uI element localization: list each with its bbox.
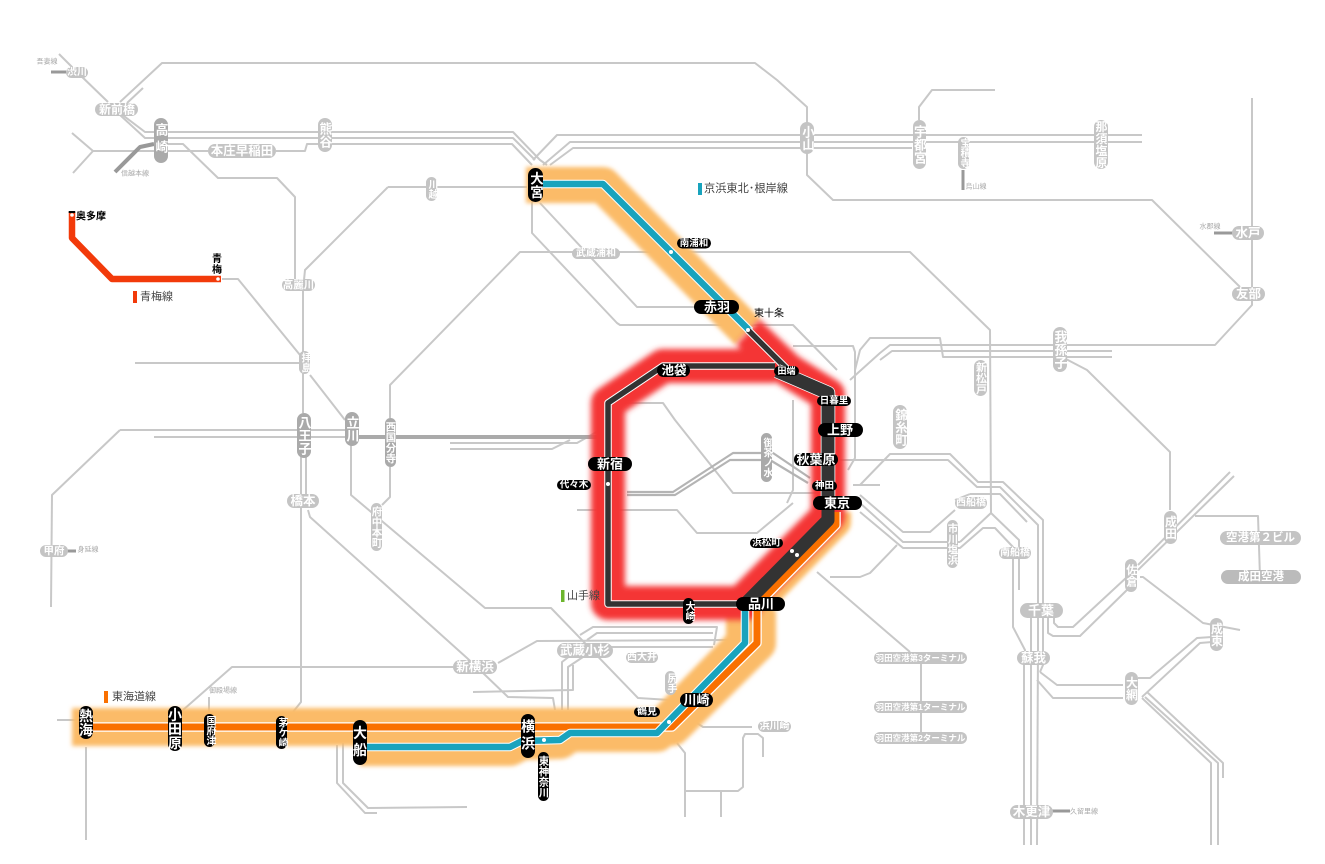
station: Oyama: 小山 <box>800 126 814 150</box>
station: Shin-Maebashi: 新前橋 <box>99 102 135 116</box>
station: Haneda Terminal 2: 羽田空港第2ターミナル <box>876 733 966 743</box>
station: Akabane <box>694 300 739 314</box>
station: Ueno <box>818 422 863 438</box>
legend: Ome line: 青梅線 <box>140 289 173 303</box>
station: Honjo-Waseda: 本庄早稲田 <box>211 143 273 158</box>
station: Ochanomizu: 御茶ノ水 <box>761 436 773 478</box>
station: Akihabara: 秋葉原 <box>796 452 836 467</box>
station: Higashi-Kanagawa: 東神奈川 <box>538 755 550 798</box>
branch line labels: 烏山線 <box>966 182 986 190</box>
station: Kinshicho: 錦糸町 <box>893 407 907 446</box>
station: Ikebukuro: 池袋 <box>661 362 687 378</box>
station: Hamamatsucho: 浜松町 <box>752 536 781 548</box>
station: Shin-Yokohama: 新横浜 <box>456 659 494 674</box>
station: Mito: 水戸 <box>1235 225 1261 240</box>
station: Sakura: 佐倉 <box>1125 563 1138 588</box>
branch line labels: 御殿場線 <box>209 686 237 694</box>
label: Higashi-Jujo: 東十条 <box>754 306 784 320</box>
legend: Tokaido line: 東海道線 <box>112 689 156 703</box>
station: Kanda <box>812 480 837 492</box>
station: Chiba <box>1020 603 1063 618</box>
station: Soga: 蘇我 <box>1021 650 1046 665</box>
station: Takasaki: 高崎 <box>154 122 168 157</box>
station: Tabata <box>774 365 799 376</box>
station: Hashimoto: 橋本 <box>290 493 316 508</box>
station: Narita Airport Terminal 2: 空港第２ビル <box>1226 530 1295 544</box>
Keihin-Tohoku Negishi line <box>360 184 750 747</box>
station: Shinjuku: 新宿 <box>597 456 623 472</box>
station: Shitte: 尻手 <box>665 673 677 694</box>
station: Minami-Urawa: 南浦和 <box>680 237 708 249</box>
station: Shibukawa: 渋川 <box>67 65 87 78</box>
station: Tokyo: 東京 <box>824 496 850 510</box>
station: Osaki: 大崎 <box>683 600 695 622</box>
station: Nishi-Oi: 西大井 <box>627 650 657 663</box>
label: Okutama: 奥多摩 <box>76 210 106 222</box>
station: Minami-Funabashi: 南船橋 <box>1000 546 1030 558</box>
station: Atami: 熱海 <box>78 708 94 738</box>
station: Tsurumi: 鶴見 <box>637 704 657 718</box>
station: Shin-Matsudo: 新松戸 <box>974 360 987 395</box>
station: Nasushiobara: 那須塩原 <box>1094 120 1108 168</box>
station: Shinjuku <box>588 456 632 472</box>
station: Musashi-Urawa: 武蔵浦和 <box>576 246 616 259</box>
branch line labels <box>36 56 1220 816</box>
station: Nishi-Funabashi: 西船橋 <box>956 496 986 508</box>
station: Haijima: 拝島 <box>299 351 311 373</box>
station: Shinagawa <box>736 596 785 612</box>
station: Fuchu-Hommachi: 府中本町 <box>370 506 382 548</box>
black station pills <box>78 168 863 801</box>
station: Naruto: 成東 <box>1210 621 1224 647</box>
station: Ofuna: 大船 <box>352 725 368 760</box>
station: Kofu: 甲府 <box>44 545 65 557</box>
station: Ichikawa-Shiohama: 市川塩浜 <box>946 522 958 566</box>
branch line labels: 久留里線 <box>1070 806 1098 816</box>
station: Komagawa: 高麗川 <box>283 278 314 291</box>
station: Tsurumi <box>634 704 660 718</box>
station: Shinagawa: 品川 <box>748 596 774 612</box>
branch line labels: 信越本線 <box>121 168 149 178</box>
station: Sakura <box>1125 559 1138 592</box>
station: Akabane: 赤羽 <box>704 300 730 314</box>
legend: Keihin-Tohoku line: 京浜東北･根岸線 <box>704 182 788 195</box>
station: Hama-Kawasaki: 浜川崎 <box>760 719 790 732</box>
Tokaido line <box>86 512 836 727</box>
station: Chigasaki: 茅ケ崎 <box>276 717 288 748</box>
station: Tachikawa: 立川 <box>344 415 360 442</box>
station: Kawasaki: 川崎 <box>683 692 710 708</box>
station: Musashi-Kosugi: 武蔵小杉 <box>560 642 610 658</box>
station: Yokohama: 横浜 <box>520 718 536 753</box>
station: Kumagaya: 熊谷 <box>318 121 332 148</box>
station: Nishi-Kokubunji: 西国分寺 <box>384 422 396 464</box>
station: Haneda Terminal 1: 羽田空港第1ターミナル <box>876 702 966 712</box>
station: Narita Airport <box>1221 569 1301 584</box>
station: Tokyo <box>813 496 862 510</box>
station: Chiba: 千葉 <box>1028 603 1054 618</box>
label: Ome <box>212 252 222 276</box>
label: Ome: 青 <box>212 252 222 265</box>
station: Hoshakuji: 宝積寺 <box>958 138 970 168</box>
station: Kanda: 神田 <box>815 480 834 492</box>
orange halo <box>72 185 836 747</box>
station: Ueno: 上野 <box>827 422 853 438</box>
label: Ome: 梅 <box>212 263 222 276</box>
station: Narita: 成田 <box>1164 514 1178 540</box>
branch line labels: 水郡線 <box>1200 222 1220 230</box>
Ome line <box>69 211 221 281</box>
station: Omiya: 大宮 <box>528 170 544 199</box>
branch line labels: 身延線 <box>78 544 98 554</box>
station: Utsunomiya: 宇都宮 <box>912 125 927 164</box>
station: Kawagoe: 川越 <box>426 179 438 200</box>
station: Odawara: 小田原 <box>167 708 183 750</box>
Yamanote line <box>608 330 828 604</box>
station: Kisarazu: 木更津 <box>1013 804 1051 819</box>
station: Nippori: 日暮里 <box>820 394 849 406</box>
station: Narita Airport: 成田空港 <box>1238 569 1284 583</box>
station: Tabata: 田端 <box>777 365 796 376</box>
station: Oami: 大網 <box>1124 675 1138 701</box>
station: Haneda Terminal 3: 羽田空港第3ターミナル <box>876 653 966 663</box>
station: Hachioji: 八王子 <box>296 416 312 456</box>
station: Yoyogi: 代々木 <box>560 478 589 490</box>
red halo <box>608 332 828 603</box>
legend: Yamanote line: 山手線 <box>567 588 600 602</box>
station: Tomobe: 友部 <box>1236 286 1261 301</box>
small station dots <box>542 250 799 742</box>
station: Narita Airport Terminal 2 <box>1220 530 1301 545</box>
station: Kozu: 国府津 <box>204 715 216 746</box>
branch line labels: 吾妻線 <box>36 56 58 66</box>
station: Abiko: 我孫子 <box>1052 330 1068 370</box>
